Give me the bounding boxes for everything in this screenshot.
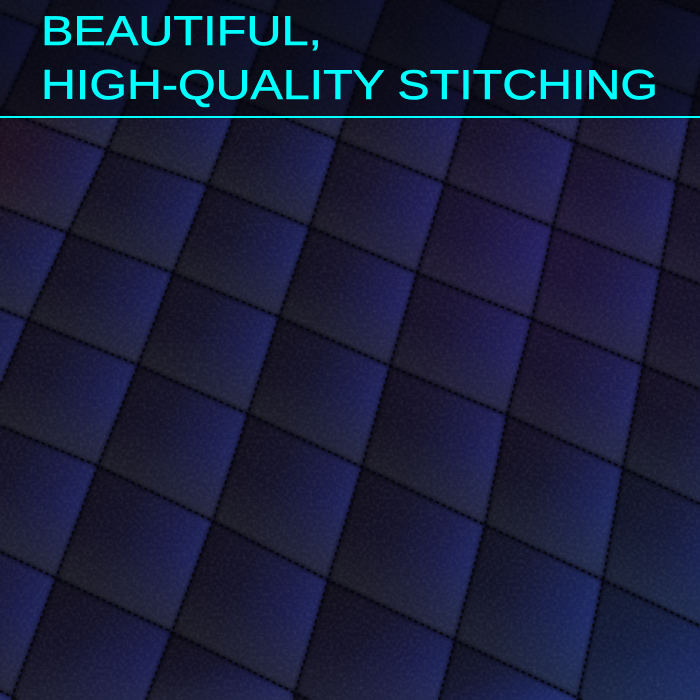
- title: HIGH-QUALITY STITCHING: [41, 61, 658, 108]
- heading divider line: [0, 116, 700, 118]
- title: BEAUTIFUL,: [41, 7, 322, 54]
- panel: dark heading band: [0, 0, 700, 116]
- title: [41, 7, 658, 108]
